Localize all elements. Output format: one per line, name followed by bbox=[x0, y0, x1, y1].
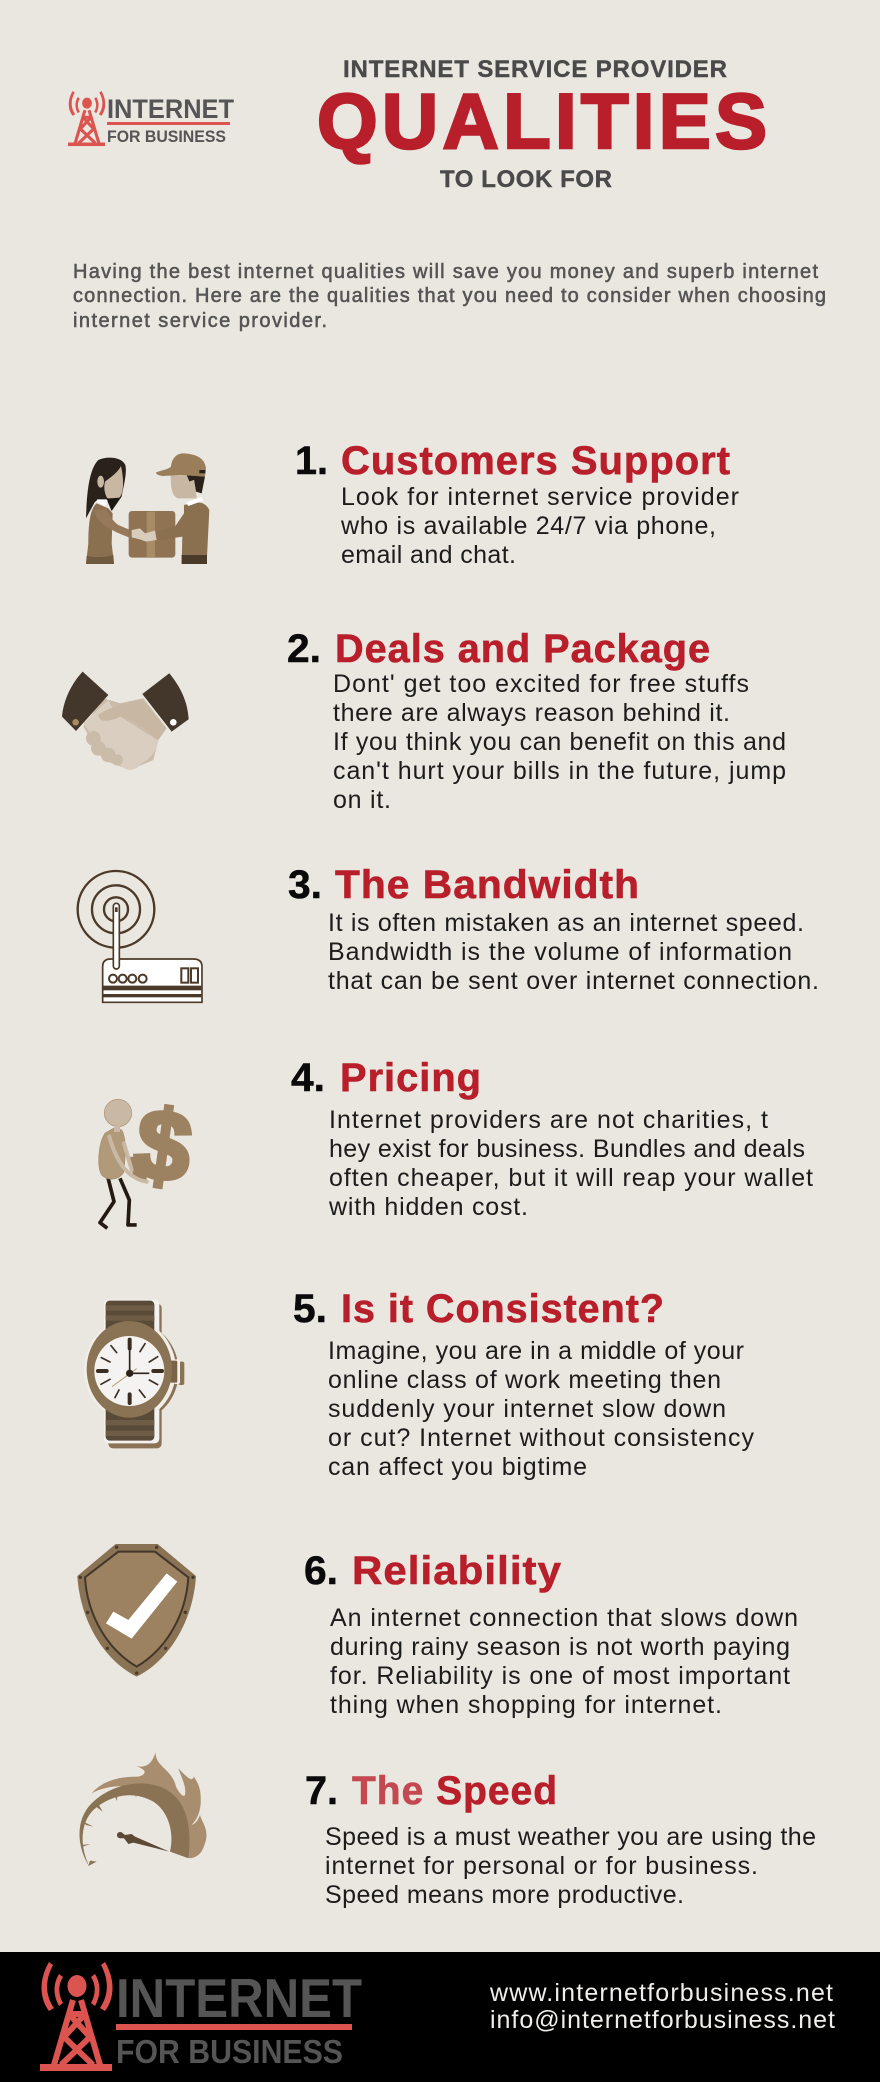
body text: suddenly your internet slow down bbox=[328, 1395, 726, 1423]
heading: Reliability bbox=[352, 1549, 562, 1593]
body text bbox=[325, 1823, 816, 1909]
heading: Is it Consistent? bbox=[341, 1287, 665, 1331]
body text: during rainy season is not worth paying bbox=[330, 1633, 790, 1661]
body text: that can be sent over internet connection. bbox=[328, 967, 819, 995]
icon: radio tower bbox=[40, 1962, 112, 2071]
body text: with hidden cost. bbox=[328, 1193, 528, 1221]
body text: Speed means more productive. bbox=[325, 1881, 684, 1909]
heading: Customers Support bbox=[341, 439, 731, 483]
title line 3: TO LOOK FOR bbox=[440, 166, 612, 193]
body text: thing when shopping for internet. bbox=[330, 1691, 722, 1719]
title line 1: INTERNET SERVICE PROVIDER bbox=[343, 56, 727, 83]
body text: Imagine, you are in a middle of your bbox=[328, 1337, 744, 1365]
icon: radio tower bbox=[68, 91, 105, 146]
body text: on it. bbox=[333, 786, 391, 814]
heading: The Bandwidth bbox=[335, 863, 640, 907]
body text: internet for personal or for business. bbox=[325, 1852, 758, 1880]
body text: hey exist for business. Bundles and deals bbox=[329, 1135, 805, 1163]
intro text: internet service provider. bbox=[73, 310, 327, 332]
contact details bbox=[489, 1979, 835, 2034]
body text bbox=[328, 909, 819, 995]
heading: Pricing bbox=[340, 1056, 482, 1100]
item 7: the speed bbox=[79, 1752, 816, 1909]
intro text: Having the best internet qualities will save you money and superb internet bbox=[73, 261, 818, 283]
body text: email and chat. bbox=[341, 541, 516, 569]
footer logo bbox=[40, 1962, 362, 2071]
body text: or cut? Internet without consistency bbox=[328, 1424, 754, 1452]
body text: for. Reliability is one of most important bbox=[330, 1662, 790, 1690]
item 5: is it consistent bbox=[84, 1287, 755, 1481]
header logo bbox=[68, 91, 234, 146]
logo tagline: FOR BUSINESS bbox=[107, 127, 226, 146]
icon: wifi router bbox=[78, 871, 202, 1002]
body text bbox=[333, 670, 786, 814]
contact details: info@internetforbusiness.net bbox=[490, 2006, 835, 2034]
body text: An internet connection that slows down bbox=[330, 1604, 798, 1632]
icon: delivery handover bbox=[86, 453, 209, 564]
item 4: pricing bbox=[99, 1056, 813, 1228]
number: 6. bbox=[304, 1549, 338, 1593]
heading: Deals and Package bbox=[335, 627, 711, 671]
number: 2. bbox=[287, 627, 321, 671]
item 2: deals and package bbox=[62, 627, 786, 814]
body text: If you think you can benefit on this and bbox=[333, 728, 786, 756]
icon: wristwatch bbox=[84, 1299, 184, 1448]
body text: there are always reason behind it. bbox=[333, 699, 730, 727]
icon: handshake bbox=[62, 672, 189, 770]
intro text bbox=[73, 261, 826, 332]
title bbox=[317, 56, 767, 193]
body text: It is often mistaken as an internet speed. bbox=[328, 909, 804, 937]
body text: Bandwidth is the volume of information bbox=[328, 938, 792, 966]
body text: online class of work meeting then bbox=[328, 1366, 721, 1394]
item 3: the bandwidth bbox=[78, 863, 819, 1002]
logo wordmark: INTERNET bbox=[107, 94, 234, 124]
body text bbox=[328, 1337, 754, 1481]
contact details: www.internetforbusiness.net bbox=[489, 1979, 833, 2007]
intro text: connection. Here are the qualities that you need to consider when choosing bbox=[73, 285, 826, 307]
body text: Speed is a must weather you are using the bbox=[325, 1823, 816, 1851]
title main word: QUALITIES bbox=[317, 77, 767, 165]
number: 5. bbox=[293, 1287, 327, 1331]
heading: The Speed bbox=[352, 1769, 558, 1813]
logo wordmark: INTERNET bbox=[116, 1967, 362, 2029]
number: 3. bbox=[288, 863, 322, 907]
icon: flaming speedometer bbox=[79, 1752, 206, 1867]
number: 7. bbox=[305, 1769, 338, 1813]
item 1: customers support bbox=[86, 439, 739, 569]
body text bbox=[328, 1106, 813, 1221]
logo tagline: FOR BUSINESS bbox=[116, 2033, 343, 2070]
body text: Internet providers are not charities, t bbox=[329, 1106, 768, 1134]
body text bbox=[330, 1604, 798, 1719]
body text: can't hurt your bills in the future, jump bbox=[333, 757, 786, 785]
body text: Dont' get too excited for free stuffs bbox=[333, 670, 749, 698]
icon: person carrying dollar bbox=[99, 1087, 198, 1228]
footer bar bbox=[0, 1952, 880, 2082]
number: 4. bbox=[291, 1056, 325, 1100]
body text: Look for internet service provider bbox=[341, 483, 739, 511]
body text: often cheaper, but it will reap your wallet bbox=[329, 1164, 813, 1192]
number: 1. bbox=[295, 439, 328, 483]
icon: shield with check bbox=[77, 1544, 196, 1677]
item 6: reliability bbox=[77, 1544, 798, 1719]
icon: person carrying dollar: $ bbox=[129, 1087, 198, 1204]
body text: who is available 24/7 via phone, bbox=[340, 512, 716, 540]
body text bbox=[340, 483, 739, 569]
body text: can affect you bigtime bbox=[328, 1453, 587, 1481]
